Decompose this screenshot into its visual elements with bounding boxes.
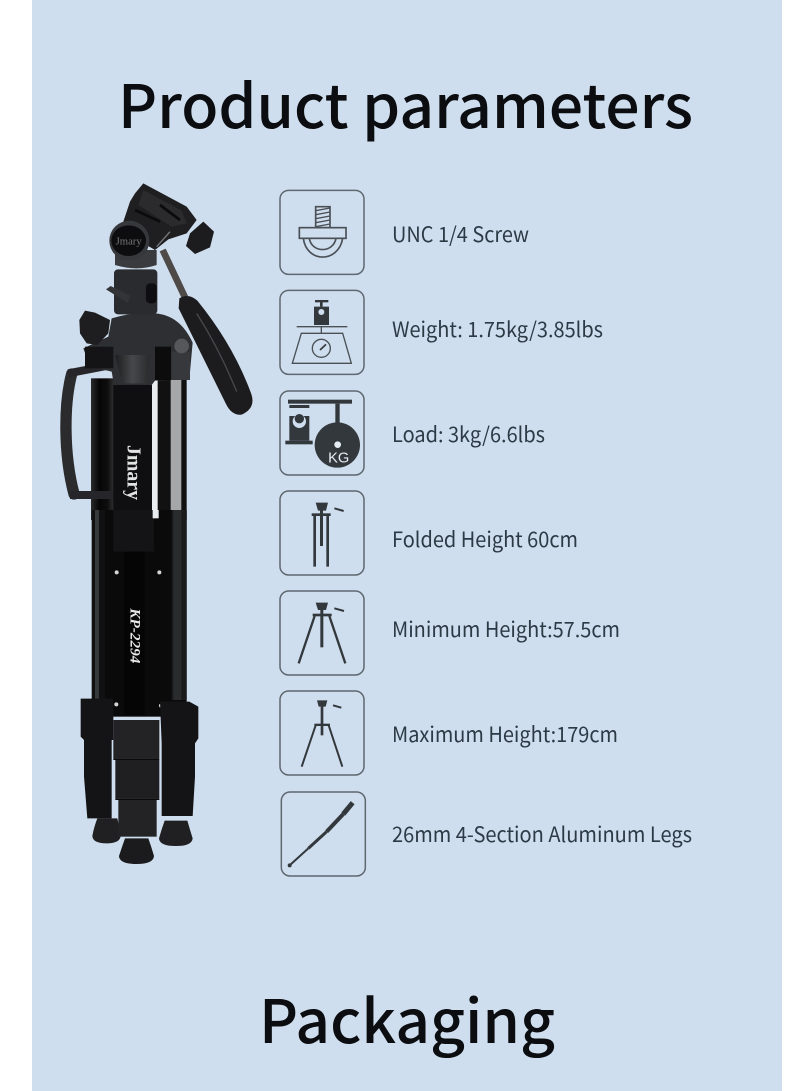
- label: UNC 1/4 Screw: [392, 219, 529, 249]
- label: Weight: 1.75kg/3.85lbs: [392, 314, 603, 344]
- label: Maximum Height:179cm: [392, 719, 618, 749]
- spec row: maximum height: [280, 691, 618, 775]
- icon: folded tripod: [280, 491, 364, 575]
- front clamps: [113, 720, 159, 837]
- label: Minimum Height:57.5cm: [392, 614, 620, 644]
- brand disc: [109, 221, 149, 261]
- spec row: legs: [281, 792, 692, 876]
- head and plate: [123, 183, 197, 250]
- upper legs: [92, 510, 107, 700]
- label: Folded Height 60cm: [392, 524, 578, 554]
- model label: KP-2294: [126, 607, 142, 664]
- spec row: minimum height: [280, 591, 620, 675]
- strap brand: Jmary: [123, 445, 145, 500]
- spec row: screw: [280, 190, 529, 274]
- spec row: load: [280, 391, 545, 475]
- right clamps: [160, 702, 198, 816]
- icon: low tripod: [280, 591, 364, 675]
- title: Product parameters: Product parameters: [118, 59, 693, 146]
- icon: load weight: [280, 391, 364, 475]
- head knob: [186, 222, 214, 254]
- left leg: [91, 378, 114, 520]
- label: 26mm 4-Section Aluminum Legs: [392, 819, 692, 849]
- tripod upper section: [66, 183, 252, 520]
- centre column collar: [114, 269, 157, 314]
- side handle: [66, 365, 113, 495]
- heading: Packaging: Packaging: [259, 974, 555, 1061]
- centre column: [124, 552, 145, 715]
- icon: extended tripod: [280, 691, 364, 775]
- strap: [113, 385, 152, 520]
- icon: weighing scale: [280, 290, 364, 374]
- right leg: [153, 378, 187, 520]
- tripod photo: [66, 183, 252, 864]
- pan handle grip: [179, 296, 252, 415]
- brand disc: Jmary: [116, 237, 142, 248]
- star knob: [79, 311, 110, 345]
- head base: [115, 250, 157, 268]
- rubber feet: [92, 818, 193, 864]
- icon: UNC screw: [280, 190, 364, 274]
- label: Load: 3kg/6.6lbs: [392, 419, 545, 449]
- hub: [83, 313, 193, 385]
- spec row: folded height: [280, 491, 578, 575]
- icon: aluminum leg: [281, 792, 365, 876]
- icon: load weight: KG: [328, 451, 349, 467]
- tripod lower section: [81, 510, 198, 864]
- spec row: weight: [280, 290, 603, 374]
- left clamps: [81, 699, 113, 818]
- pan handle rod: [163, 250, 185, 297]
